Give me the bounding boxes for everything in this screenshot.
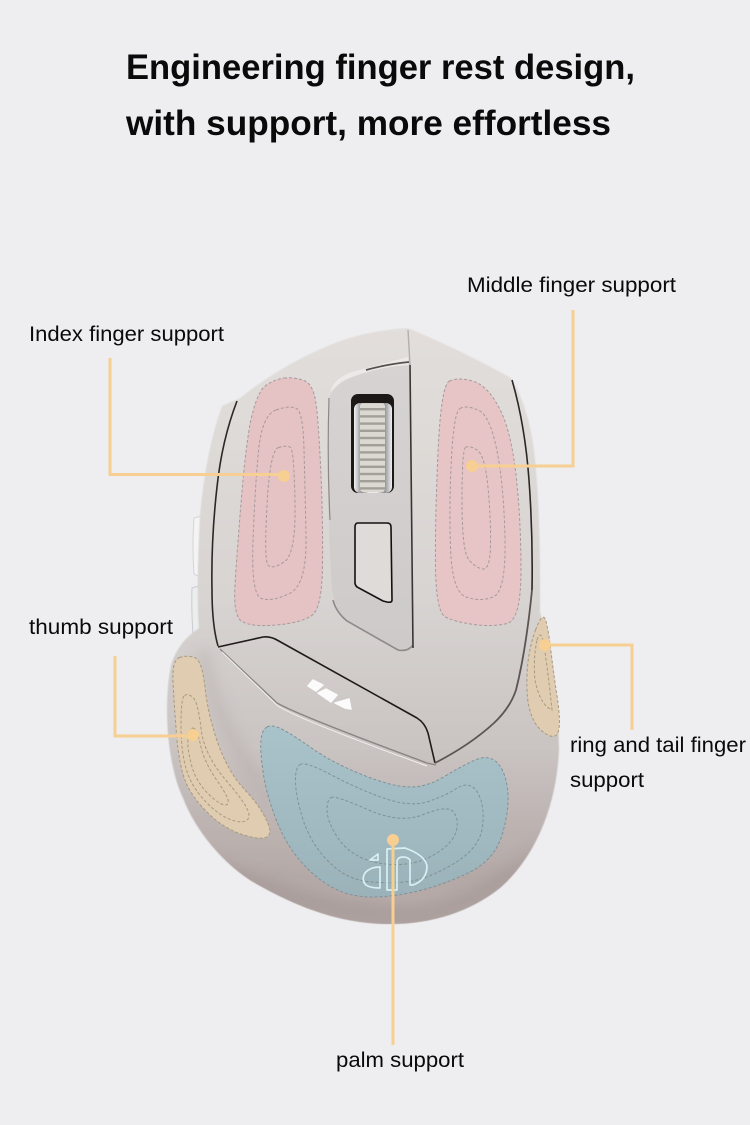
centre panel: [328, 357, 413, 650]
title: Engineering finger rest design,: [126, 48, 635, 87]
callout: ring and tail finger: support: [570, 769, 644, 792]
callout: middle finger: Middle finger support: [467, 274, 676, 297]
side buttons: [192, 516, 204, 657]
callout: ring and tail finger: ring and tail finger: [570, 734, 746, 757]
body shading: [190, 650, 545, 930]
callout: ring and tail finger: [539, 639, 746, 792]
scroll wheel: [351, 394, 394, 493]
callout: thumb: [29, 616, 199, 741]
LED indicators: [308, 680, 351, 709]
callout: index finger: [29, 323, 290, 482]
callout: middle finger: [466, 274, 676, 472]
pad: ring and tail finger: [527, 617, 559, 736]
title: with support, more effortless: [125, 104, 611, 143]
centre button: [355, 523, 392, 602]
pad: index finger: [235, 378, 323, 626]
mouse illustration: [167, 328, 559, 930]
callout: thumb: thumb support: [29, 616, 173, 639]
callout: palm: [336, 834, 464, 1072]
callout: index finger: Index finger support: [29, 323, 224, 346]
pad: palm: [261, 726, 508, 897]
pad: thumb: [173, 656, 270, 838]
shell seams: [212, 330, 532, 766]
logo: [363, 848, 427, 890]
callout: palm: palm support: [336, 1049, 464, 1072]
title: [125, 48, 635, 143]
mouse body: [167, 328, 559, 924]
pad: middle finger: [435, 379, 521, 626]
